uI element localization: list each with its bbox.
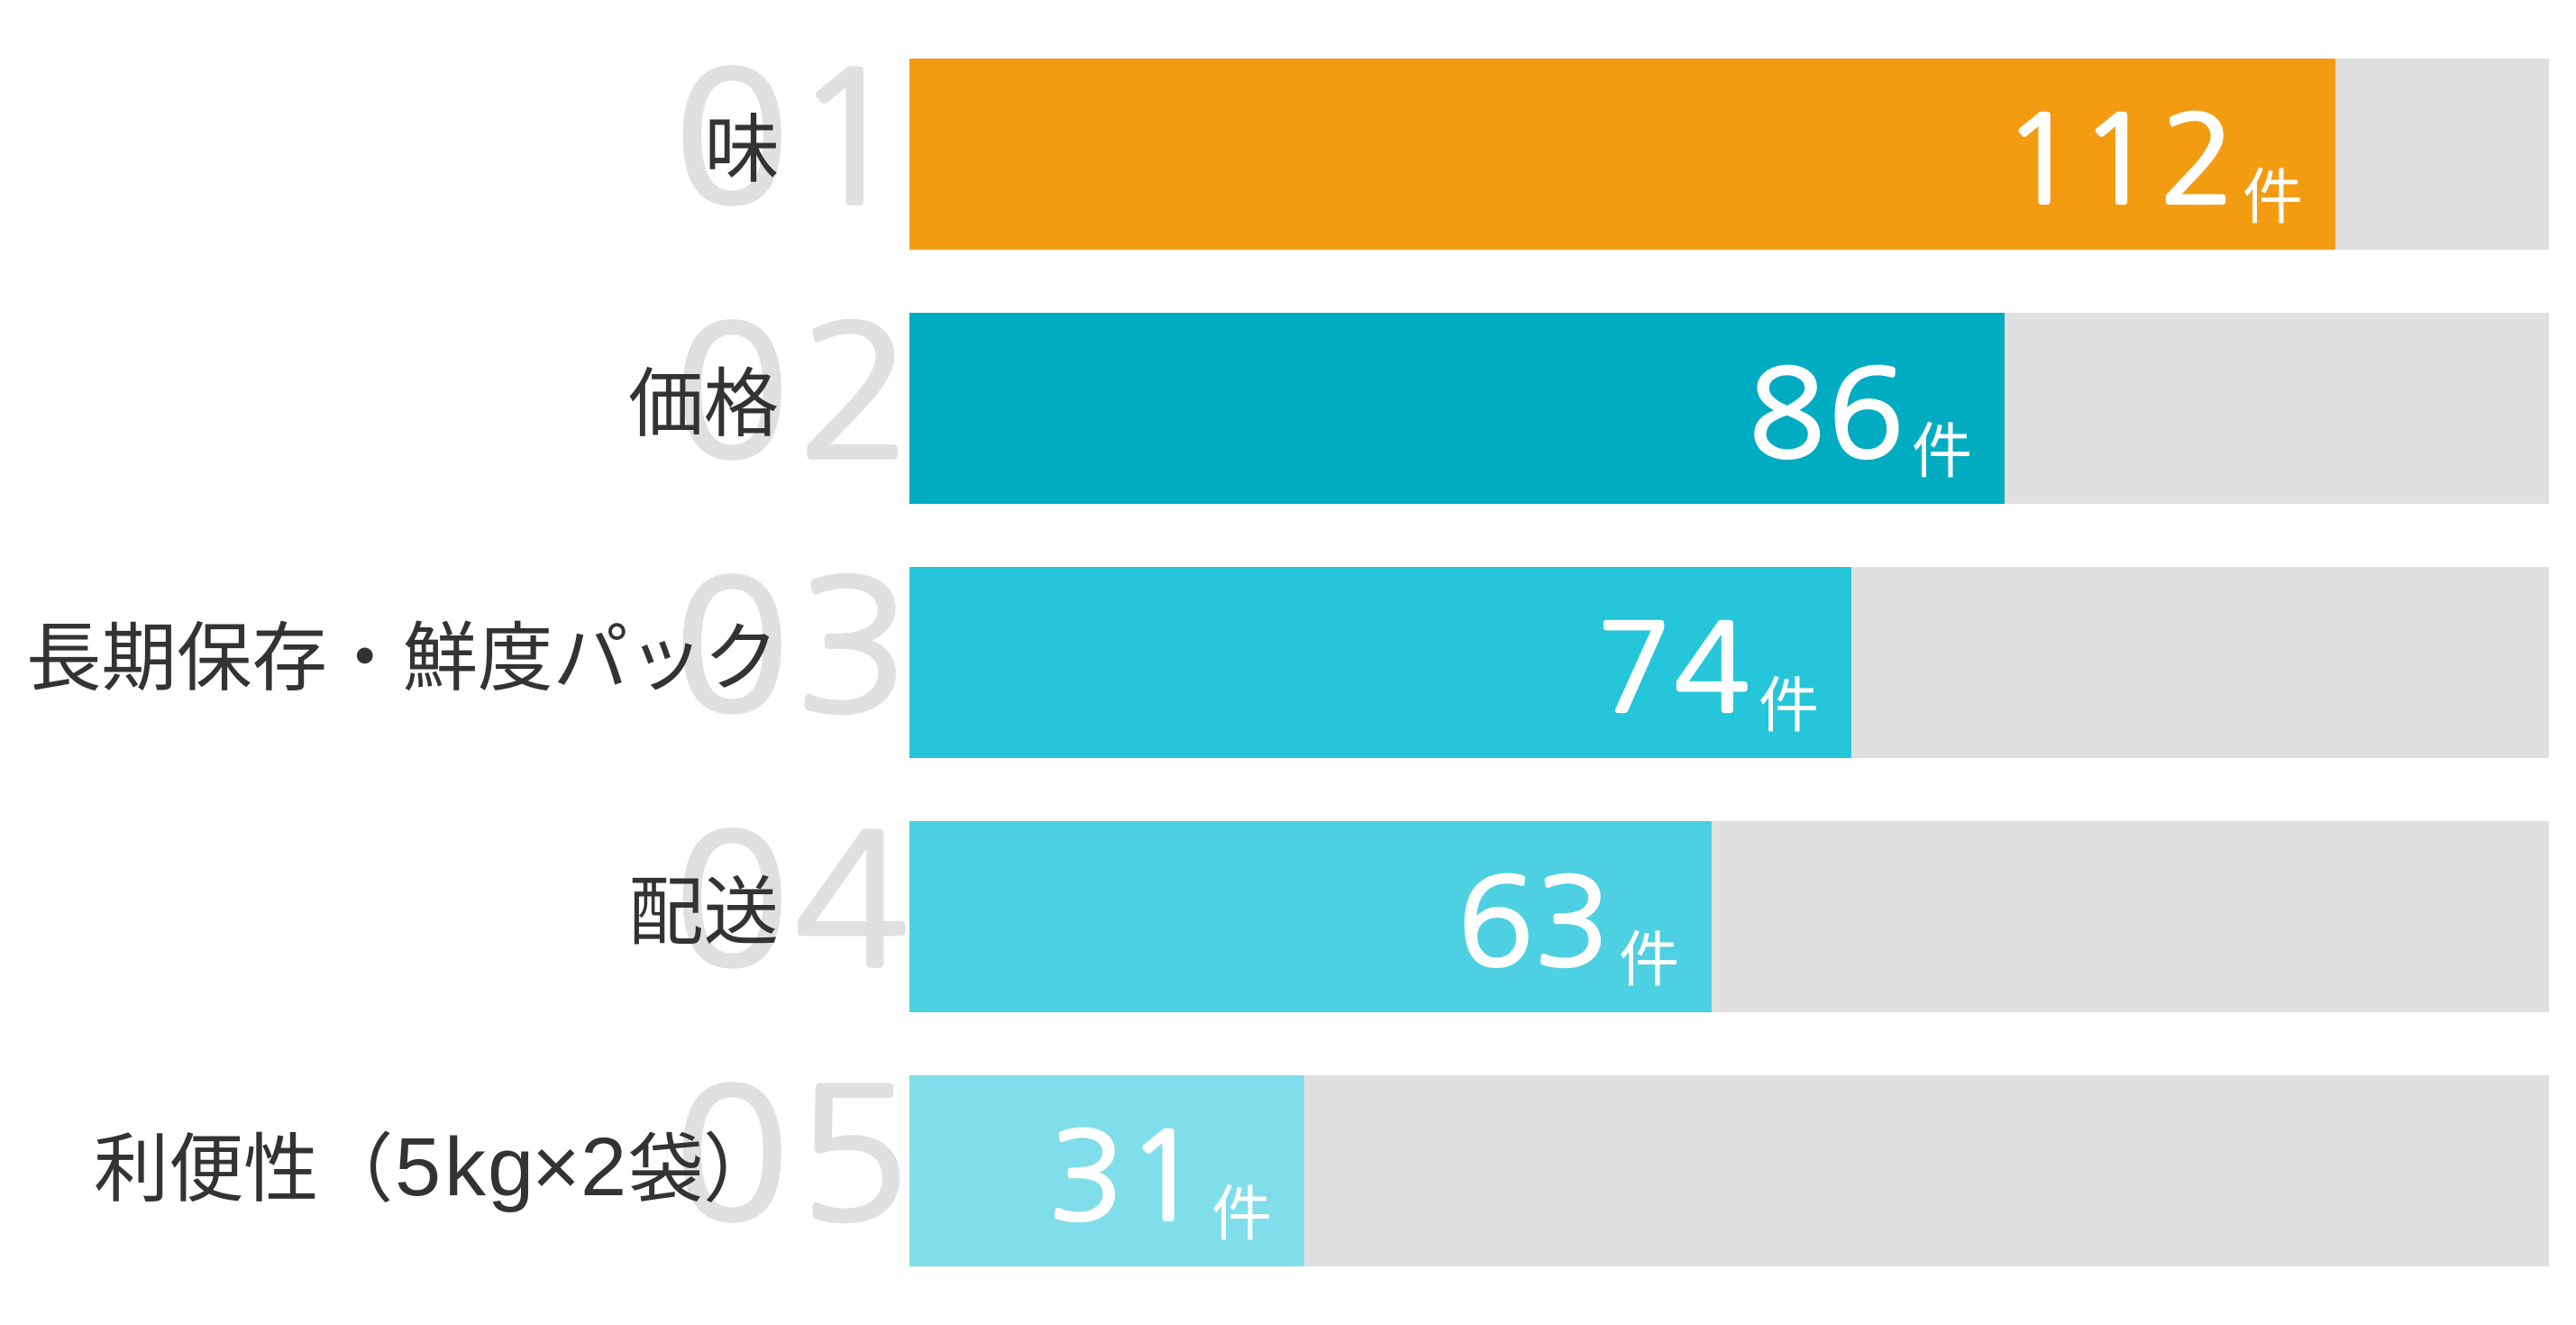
unit: 件 — [2243, 149, 2303, 236]
row 04: 配送 — [628, 810, 2549, 1012]
bar 31 — [909, 1075, 1304, 1266]
label: 利便性（5kg×2袋）: 5kg×2 — [395, 1121, 626, 1213]
value 31: 31 — [1048, 1116, 1202, 1238]
track 03 — [909, 567, 2549, 758]
rank number 02: 02 — [673, 302, 914, 483]
row 03: 長期保存・鮮度パック — [26, 556, 2549, 758]
unit: 件 — [1912, 403, 1972, 490]
rank number 05: 05 — [673, 1065, 911, 1246]
track 02 — [909, 313, 2549, 504]
track 05 — [909, 1075, 2549, 1266]
value 86: 86 — [1749, 353, 1904, 475]
value 112: 112 — [2003, 99, 2235, 221]
value 74: 74 — [1596, 608, 1749, 729]
unit: 件 — [1619, 911, 1679, 999]
bar 74 — [909, 567, 1851, 758]
row 01: 味 — [673, 48, 2549, 250]
bar 86 — [909, 313, 2005, 504]
label: 利便性（5kg×2袋）: 袋） — [628, 1127, 779, 1211]
label: 配送: 配送 — [628, 870, 779, 955]
unit: 件 — [1211, 1165, 1272, 1253]
row 02: 価格 — [628, 302, 2549, 504]
bar 63 — [909, 821, 1712, 1012]
label: 長期保存・鮮度パック: 長期保存・鮮度パック — [26, 616, 779, 700]
rank number 03: 03 — [673, 556, 910, 737]
rank number 04: 04 — [673, 810, 909, 991]
track 01 — [909, 59, 2549, 250]
bar 112 — [909, 59, 2335, 250]
track 04 — [909, 821, 2549, 1012]
label: 味: 味 — [705, 107, 780, 192]
label: 価格: 価格 — [628, 361, 779, 446]
unit: 件 — [1758, 657, 1819, 745]
rank number 01: 01 — [673, 48, 907, 229]
label: 利便性（5kg×2袋）: 利便性（ — [94, 1127, 393, 1211]
row 05: 利便性（5kg×2袋） — [94, 1065, 2549, 1266]
value 63: 63 — [1457, 862, 1610, 983]
